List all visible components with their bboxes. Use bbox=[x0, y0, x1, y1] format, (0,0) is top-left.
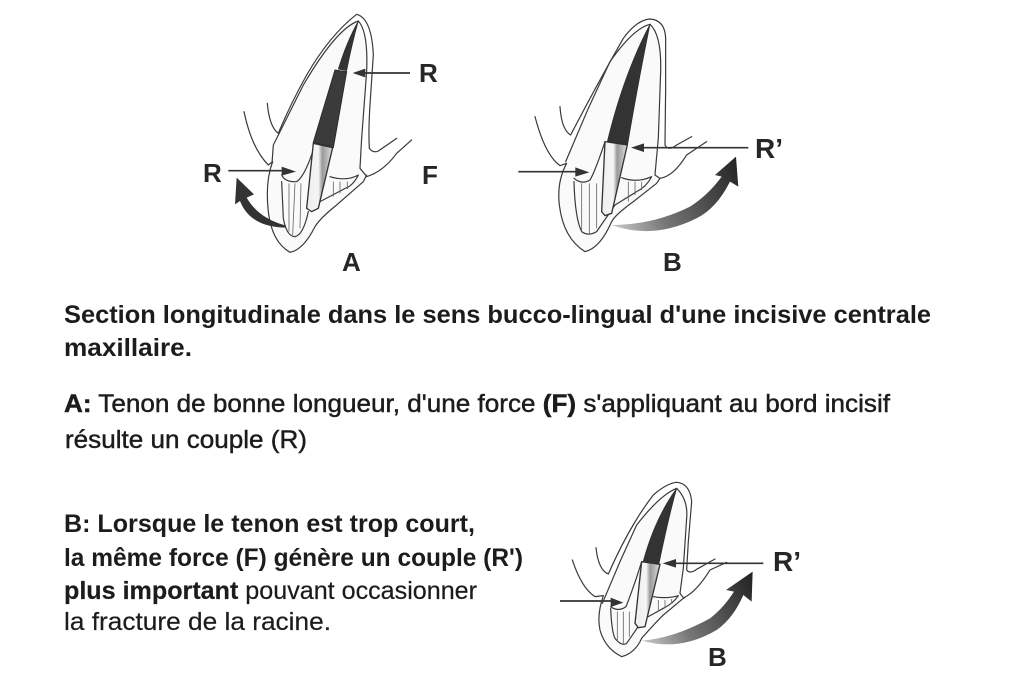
label: R prime B: R’ bbox=[755, 133, 783, 164]
heading bbox=[64, 301, 931, 362]
tooth A outline bbox=[244, 14, 412, 252]
text block A: résulte un couple (R) bbox=[65, 426, 307, 454]
tooth B outline bbox=[535, 19, 707, 252]
label: B: B bbox=[663, 247, 682, 277]
arrow: force F bbox=[560, 598, 623, 607]
diagram B: short post bbox=[518, 19, 748, 252]
text block B: B: Lorsque le tenon est trop court, bbox=[64, 510, 475, 538]
curved arrow C bbox=[642, 572, 753, 644]
label: R top: R bbox=[419, 58, 438, 88]
diagram C: short post, small copy bbox=[560, 482, 763, 657]
arrow: R prime bbox=[663, 559, 763, 568]
post A bbox=[307, 21, 358, 212]
text block B: la même force (F) génère un couple (R') bbox=[64, 544, 523, 572]
heading: Section longitudinale dans le sens bucco-lingual d'une incisive centrale bbox=[64, 301, 931, 329]
label: B small: B bbox=[708, 642, 727, 672]
text block B: la fracture de la racine. bbox=[64, 608, 331, 636]
arrow: R prime bbox=[631, 143, 748, 152]
label: R left: R bbox=[203, 158, 222, 188]
curved arrow B bbox=[612, 157, 738, 231]
tooth C outline bbox=[572, 482, 727, 657]
text block A bbox=[64, 390, 890, 454]
label: R prime C: R’ bbox=[773, 546, 801, 577]
arrow: lower R bbox=[228, 167, 296, 176]
post B bbox=[602, 24, 650, 216]
curved arrow A bbox=[235, 178, 286, 228]
post C bbox=[635, 488, 677, 628]
text block B: plus important pouvant occasionner bbox=[64, 577, 477, 605]
label: F: F bbox=[422, 160, 438, 190]
diagram A: long post bbox=[228, 14, 412, 252]
heading: maxillaire. bbox=[64, 334, 192, 362]
label: A: A bbox=[342, 247, 361, 277]
arrow: upper R bbox=[353, 69, 410, 77]
text block A: A: Tenon de bonne longueur, d'une force (F) s'appliquant au bord incisif bbox=[64, 390, 890, 418]
text block B bbox=[64, 510, 523, 636]
arrow: force F bbox=[518, 167, 589, 177]
